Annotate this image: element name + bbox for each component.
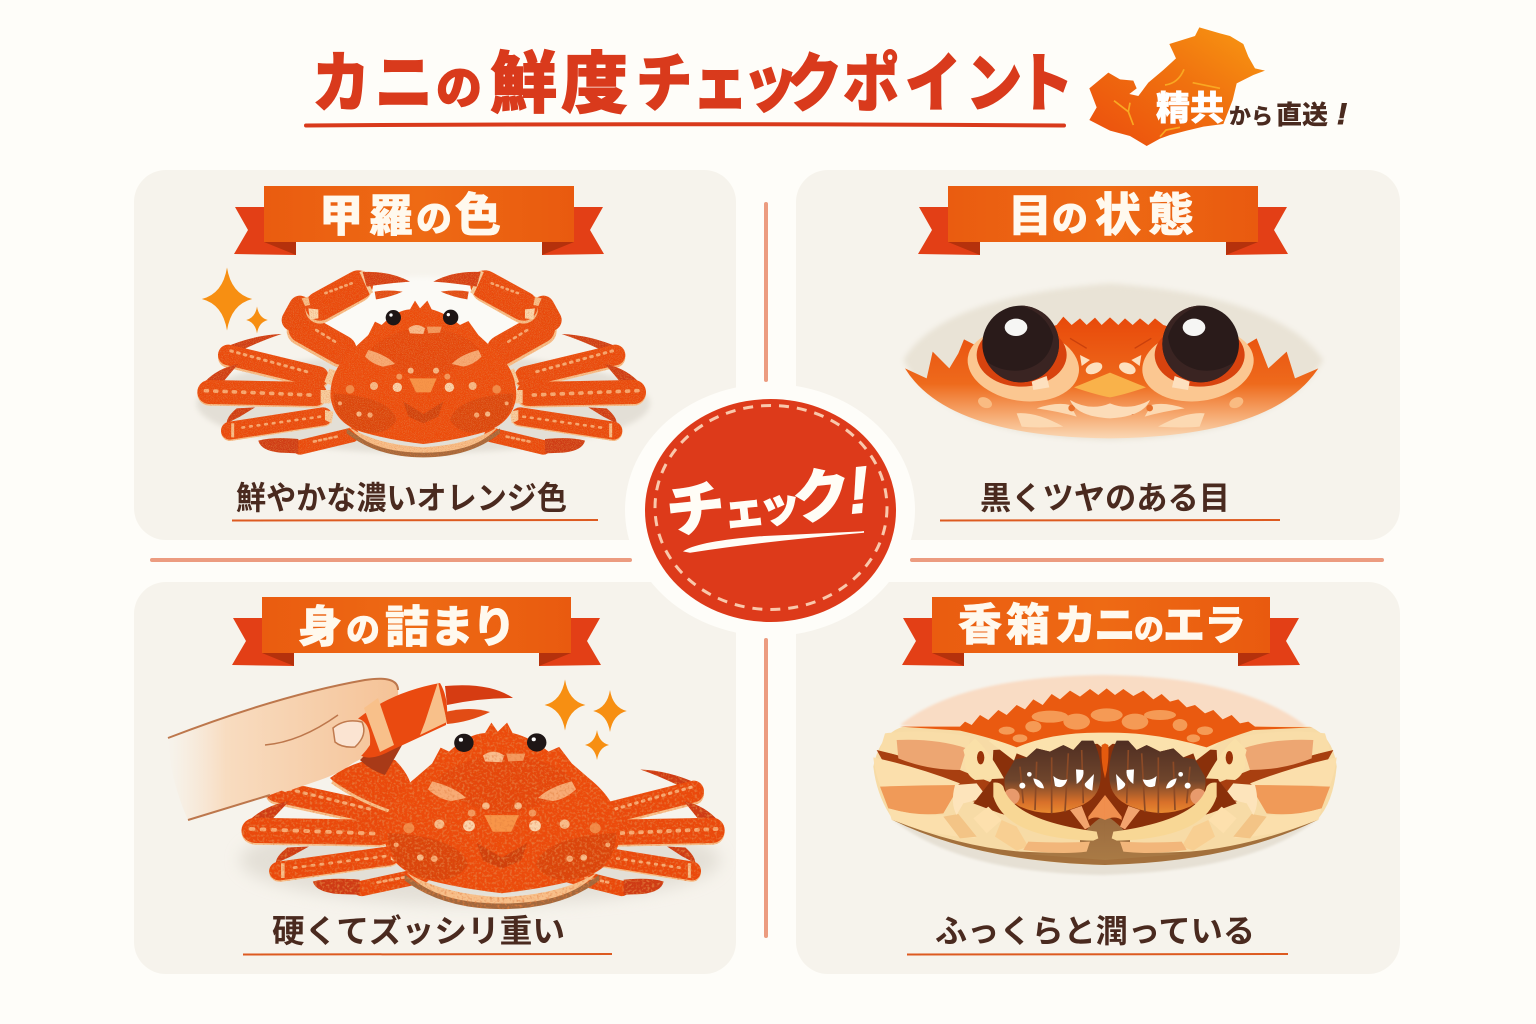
title underline <box>306 124 1064 126</box>
centre badge: check <box>625 384 915 636</box>
divider: vertical top <box>764 204 768 380</box>
title: の <box>436 62 482 114</box>
origin text: ! <box>1337 98 1347 131</box>
icon: sparkles <box>202 268 268 334</box>
badge text: ! <box>844 452 873 528</box>
banner: meat fullness: 詰まり <box>385 603 516 652</box>
illustration: crab held by hand <box>168 679 720 909</box>
badge text: ェ <box>721 485 767 536</box>
panel: shell colour <box>134 170 736 540</box>
icon: hand <box>168 679 400 820</box>
banner: shell colour: 甲羅 <box>319 192 413 241</box>
thumb <box>240 715 370 792</box>
origin text: 直送 <box>1276 100 1328 130</box>
banner: eye condition: の <box>1052 198 1088 239</box>
badge swoosh <box>685 532 864 552</box>
badge text: ッ <box>756 481 803 532</box>
caption: meat fullness: 硬くてズッシリ重い <box>272 913 565 949</box>
badge text <box>663 452 873 547</box>
map of region <box>1089 27 1265 146</box>
origin text: 精共 <box>1156 90 1224 128</box>
illustration: gills close-up <box>873 675 1337 875</box>
caption: eye condition: 黒くツヤのある目 <box>980 480 1230 516</box>
illustration: crab eyes close-up <box>903 283 1323 440</box>
caption underline <box>907 953 1288 956</box>
panel: eye condition <box>796 170 1400 540</box>
title: カニ <box>312 48 433 121</box>
banner: shell colour: の <box>416 198 452 239</box>
banner: kobako crab gills: 香箱 <box>958 601 1050 650</box>
caption: shell colour: 鮮やかな濃いオレンジ色 <box>236 480 567 516</box>
banner: meat fullness <box>232 597 601 666</box>
badge text: チ <box>663 475 728 546</box>
map badge: region map with origin text <box>1089 27 1347 146</box>
banner: meat fullness: の <box>346 612 380 650</box>
divider: horizontal right <box>912 558 1382 562</box>
title: 鮮度 <box>490 47 628 122</box>
illustration: crab with bright shell <box>197 271 650 457</box>
panel: meat fullness <box>134 582 736 974</box>
title <box>312 47 1074 122</box>
claw held in fingers <box>338 682 513 775</box>
banner: eye condition: 状態 <box>1095 189 1194 241</box>
caption: kobako crab gills: ふっくらと潤っている <box>935 913 1255 949</box>
caption underline <box>940 519 1280 522</box>
origin text <box>1156 90 1347 131</box>
banner: shell colour: 色 <box>455 189 501 241</box>
icon: sparkles <box>545 680 627 760</box>
title: チェックポイント <box>636 48 1074 120</box>
divider: horizontal left <box>152 558 630 562</box>
caption underline <box>243 953 612 956</box>
banner: kobako crab gills: カニ <box>1054 602 1136 649</box>
banner: eye condition <box>918 186 1288 255</box>
caption underline <box>232 519 598 522</box>
banner: shell colour <box>234 186 604 255</box>
banner: kobako crab gills <box>902 597 1300 666</box>
badge text: ク <box>790 462 854 532</box>
origin text: から <box>1229 104 1273 129</box>
banner: kobako crab gills: エラ <box>1163 602 1246 649</box>
banner: kobako crab gills: の <box>1134 614 1164 647</box>
banner: meat fullness: 身 <box>298 603 342 652</box>
divider: vertical bottom <box>764 640 768 936</box>
panel: kobako crab gills <box>796 582 1400 974</box>
banner: eye condition: 目 <box>1008 192 1052 241</box>
